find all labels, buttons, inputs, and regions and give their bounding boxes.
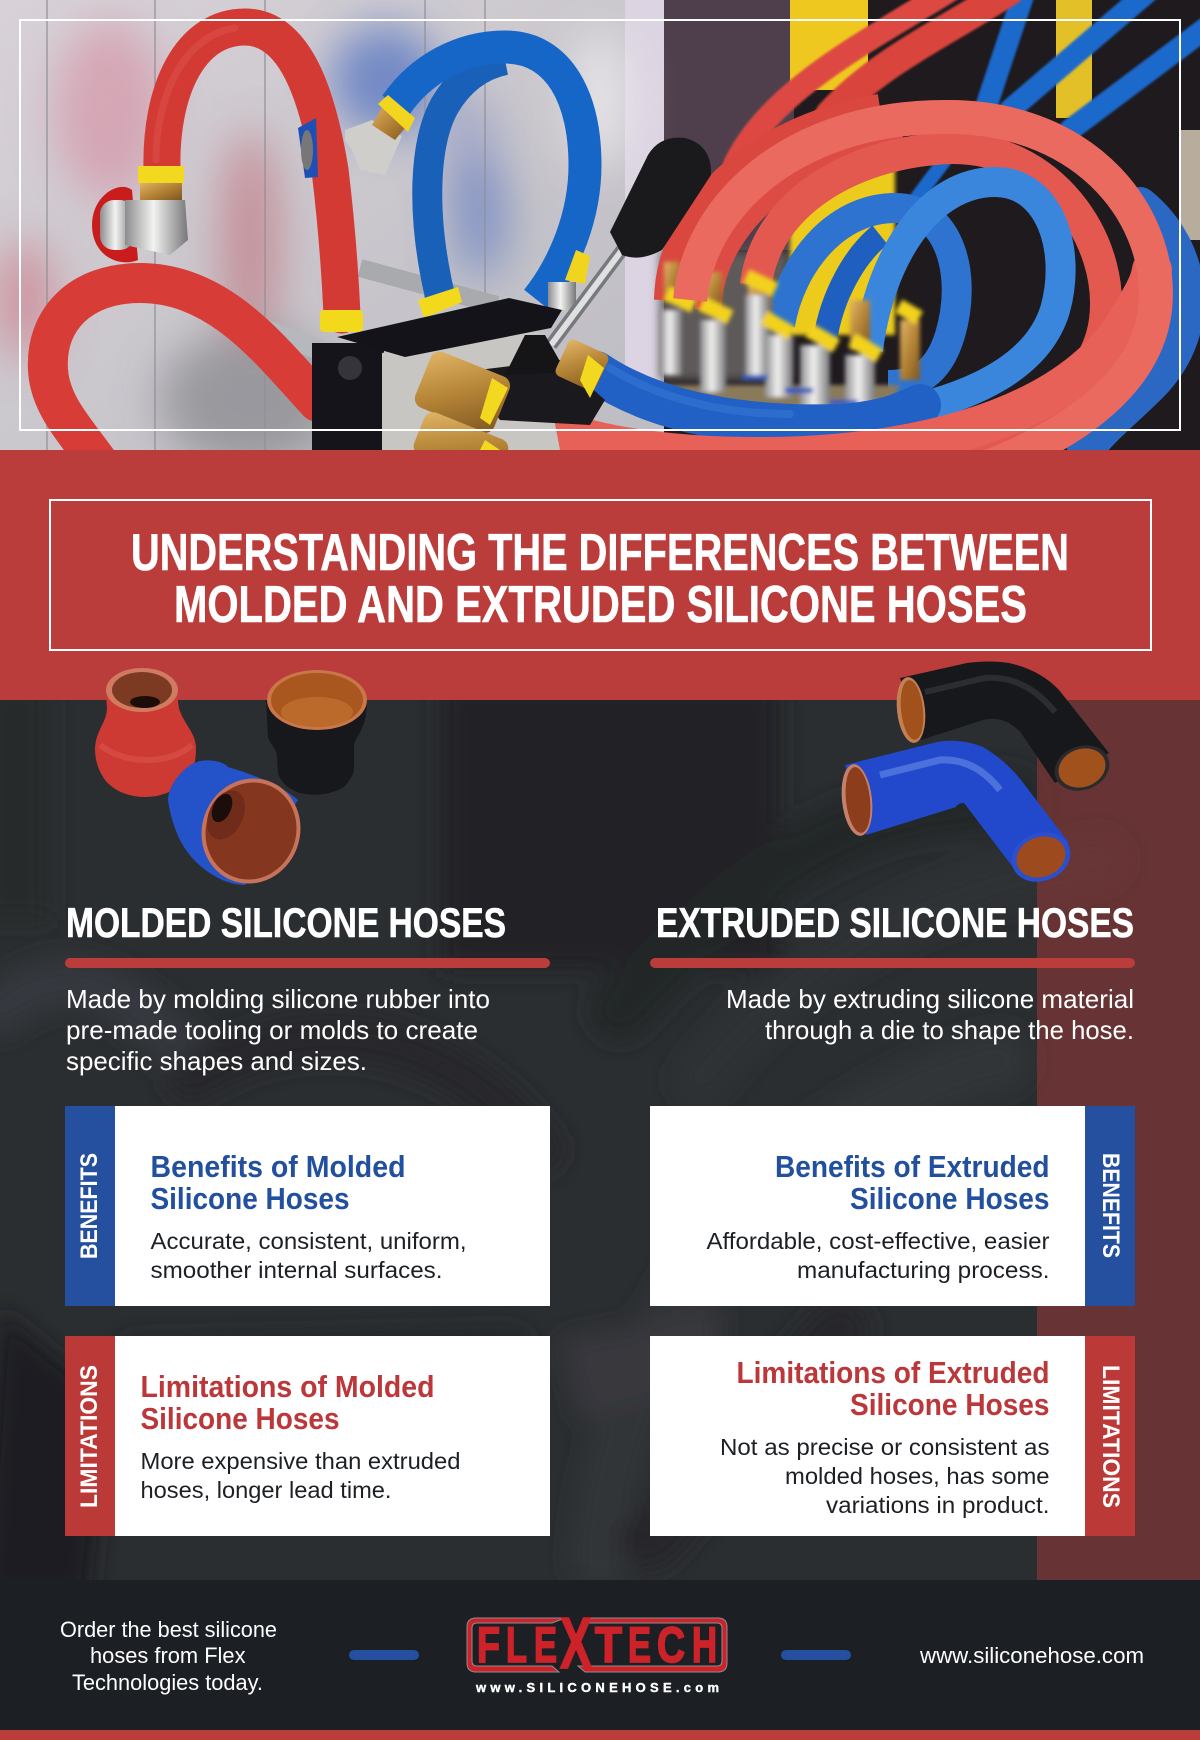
card: limitations of extruded: Limitations of Extruded: [736, 1355, 1050, 1390]
title box: [50, 500, 1151, 650]
lever blue hose: [596, 368, 920, 425]
knob and valve body: [485, 360, 605, 425]
card: benefits of molded: Benefits of Molded: [150, 1149, 406, 1184]
card: limitations of extruded: [650, 1336, 1135, 1536]
panel: footer: [0, 1580, 1200, 1740]
logo: Flextech: F: [477, 1617, 500, 1673]
logo: Flextech: H: [692, 1617, 717, 1673]
panel: extruded column: [650, 899, 1135, 1536]
divider left: [349, 1650, 419, 1660]
logo: Flextech: X: [560, 1604, 592, 1684]
logo: Flextech: E: [534, 1617, 557, 1673]
card: benefits of molded: BENEFITS: [76, 1153, 103, 1259]
card: limitations of molded: LIMITATIONS: [76, 1365, 103, 1508]
logo: Flextech: [467, 1604, 727, 1695]
heading: molded silicone hoses: MOLDED SILICONE HOSES: [66, 899, 506, 946]
panel: red title band: [0, 450, 1200, 700]
blue hose, far right: [1085, 205, 1187, 450]
text: extruded description: Made by extruding silicone material: [726, 984, 1134, 1014]
card: limitations of molded: Limitations of Molded: [140, 1369, 434, 1404]
blue hose loops: [780, 182, 1061, 420]
card: benefits of molded: smoother internal surfaces.: [150, 1257, 442, 1283]
panel: dark background with ghosted hoses: [0, 700, 1018, 1580]
card: limitations of extruded: Not as precise or consistent as: [720, 1434, 1050, 1460]
text: molded description: [66, 984, 490, 1076]
card: benefits of extruded: Silicone Hoses: [850, 1181, 1050, 1216]
icon: molded silicone hoses product photo: [95, 668, 367, 898]
card: limitations of molded: [65, 1336, 550, 1536]
panel: molded column: [65, 899, 550, 1536]
tube rail behind the hoses: [268, 320, 312, 358]
logo: Flextech: T: [595, 1617, 622, 1673]
card: limitations of extruded: Silicone Hoses: [850, 1387, 1050, 1422]
lower salmon hose: [497, 270, 1152, 457]
card: benefits of extruded: [650, 1106, 1135, 1306]
valve block: [312, 343, 384, 453]
card: limitations of molded: hoses, longer lead time.: [140, 1477, 392, 1503]
card: benefits of molded: Silicone Hoses: [150, 1181, 350, 1216]
logo: Flextech: L: [506, 1617, 527, 1673]
red upper hoses: [668, 108, 1106, 470]
text: extruded description: through a die to shape the hose.: [765, 1015, 1134, 1045]
fittings on left side: [92, 187, 138, 262]
frame over hero photo: [20, 20, 1180, 430]
text: call to action: Order the best silicone: [60, 1617, 277, 1642]
panel: translucent red strip on the right: [1037, 700, 1200, 1580]
blue hoses, upper right: [915, 0, 1200, 200]
card: limitations of molded: More expensive than extruded: [140, 1448, 460, 1474]
upper blue loops: [396, 47, 585, 300]
outer salmon loop: [690, 117, 1156, 470]
card: benefits of extruded: Benefits of Extruded: [775, 1149, 1050, 1184]
left red arc hose: [156, 27, 342, 315]
card: limitations of extruded: LIMITATIONS: [1097, 1365, 1124, 1508]
card: benefits of extruded: Affordable, cost-effective, easier: [706, 1228, 1050, 1254]
card: benefits of extruded: manufacturing process.: [797, 1257, 1050, 1283]
divider right: [781, 1650, 851, 1660]
text: call to action: hoses from Flex: [90, 1643, 246, 1668]
logo: Flextech: E: [628, 1617, 651, 1673]
text: call to action: [60, 1617, 277, 1695]
lever with black handle: [551, 238, 631, 345]
text: website: www.siliconehose.com: [919, 1643, 1144, 1668]
text: molded description: pre-made tooling or molds to create: [66, 1015, 478, 1045]
text: molded description: Made by molding silicone rubber into: [66, 984, 490, 1014]
card: benefits of molded: Accurate, consistent, uniform,: [150, 1228, 466, 1254]
lower left red hose: [48, 283, 318, 465]
blurred fitting row: [660, 259, 926, 404]
red hoses, upper right: [735, 0, 1010, 165]
card: limitations of extruded: molded hoses, has some: [785, 1463, 1050, 1489]
logo: Flextech: C: [657, 1617, 685, 1673]
title: [131, 524, 1069, 634]
logo: Flextech: www.SILICONEHOSE.com: [475, 1680, 719, 1695]
icon: extruded silicone hoses product photo: [838, 662, 1116, 890]
brass fittings: [414, 352, 510, 433]
text: call to action: Technologies today.: [72, 1670, 263, 1695]
card: limitations of extruded: variations in product.: [826, 1492, 1050, 1518]
text: molded description: specific shapes and sizes.: [66, 1046, 367, 1076]
card: benefits of extruded: BENEFITS: [1097, 1153, 1124, 1258]
card: limitations of molded: Silicone Hoses: [140, 1401, 340, 1436]
card: benefits of molded: [65, 1106, 550, 1306]
text: extruded description: [726, 984, 1134, 1045]
hero photo: hoses on a hydraulic manifold: [0, 0, 1200, 486]
